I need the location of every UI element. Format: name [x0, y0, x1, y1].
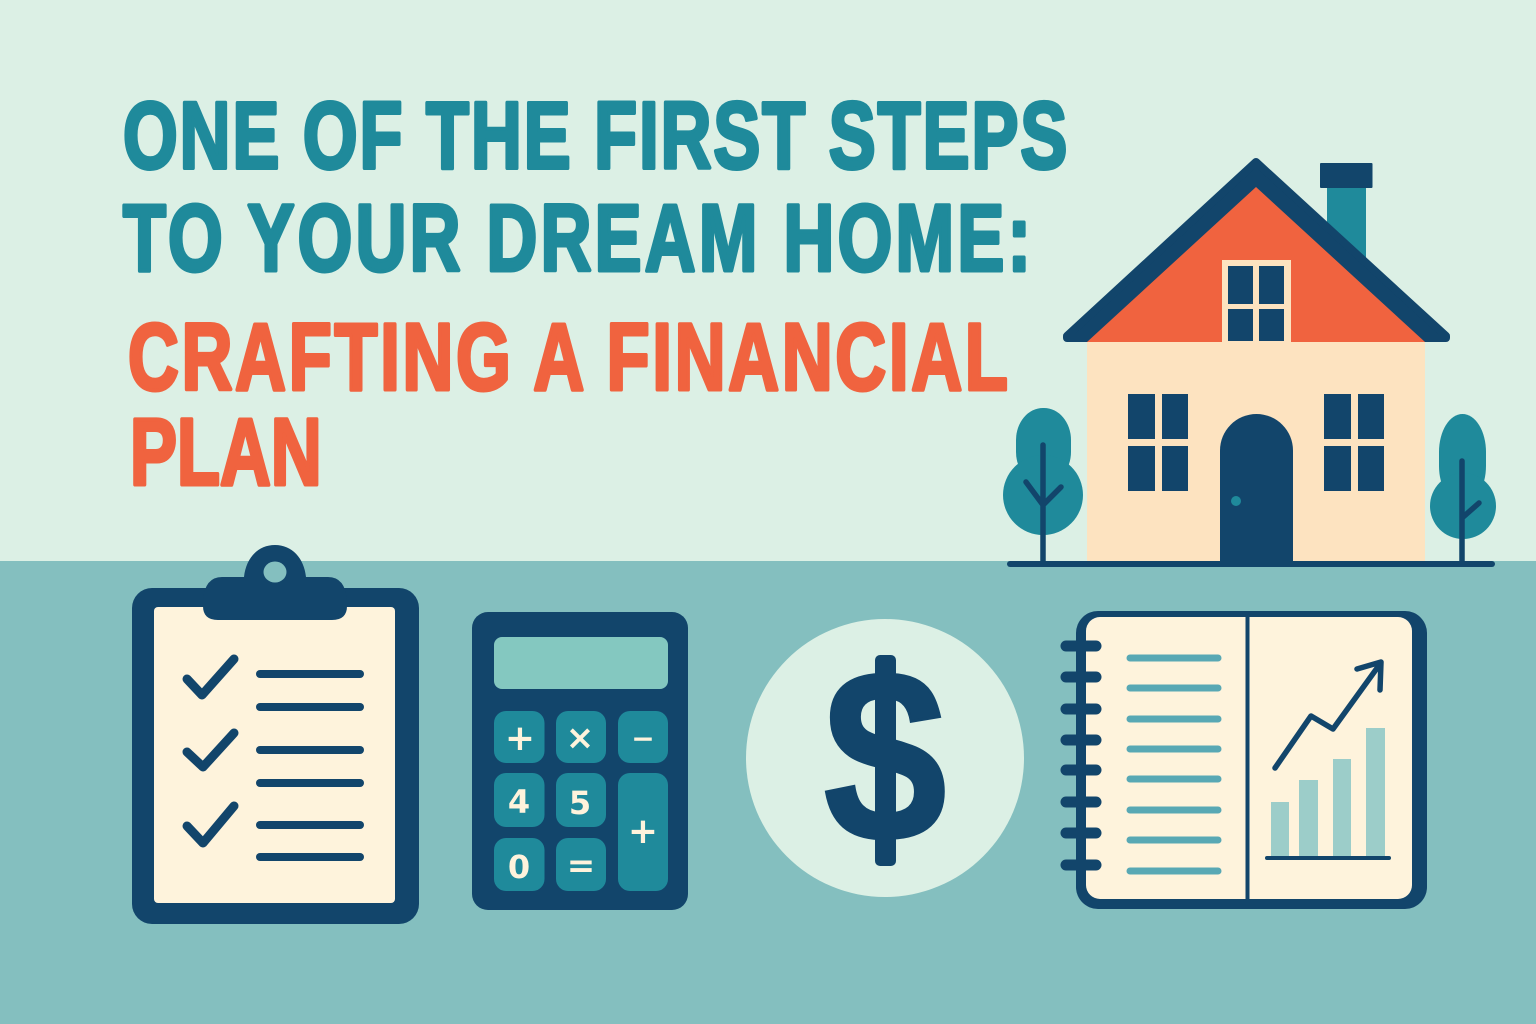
chimney — [1320, 163, 1372, 262]
key labels: × — [566, 718, 594, 758]
subheading line 1: CRAFTING A FINANCIAL — [128, 303, 1008, 410]
title — [123, 82, 1067, 505]
icon: calculator — [472, 612, 688, 910]
arrow: upward trend — [1275, 662, 1381, 768]
background: ground band — [0, 561, 1536, 1024]
key labels: 4 — [508, 783, 530, 821]
left tree — [1003, 408, 1083, 562]
subheading line 2: PLAN — [130, 398, 322, 505]
key labels: − — [631, 722, 655, 755]
heading line 2: TO YOUR DREAM HOME: — [123, 184, 1031, 291]
key labels: + — [505, 718, 535, 759]
clipboard board — [132, 588, 419, 924]
spiral rings — [1066, 646, 1096, 865]
left window — [1128, 394, 1188, 491]
icon: clipboard checklist — [132, 545, 419, 924]
key labels: + — [628, 811, 658, 852]
roof — [1067, 162, 1446, 342]
heading line 1: ONE OF THE FIRST STEPS — [123, 82, 1067, 188]
key labels: 0 — [508, 848, 530, 886]
background: sky — [0, 0, 1536, 561]
notebook text lines — [1130, 658, 1218, 871]
house wall — [1087, 342, 1425, 562]
icon: dollar coin — [746, 618, 1024, 897]
icon: notebook with growth chart — [1066, 611, 1427, 909]
bar chart — [1267, 728, 1389, 858]
check marks — [187, 659, 234, 843]
notebook cover — [1076, 611, 1427, 909]
right tree — [1430, 414, 1496, 562]
checklist lines — [260, 674, 360, 857]
paper — [154, 607, 395, 903]
calculator body — [472, 612, 688, 910]
key labels: 5 — [569, 784, 591, 822]
key labels — [505, 718, 658, 886]
icon: house with trees — [1003, 162, 1496, 566]
ground line — [1010, 561, 1492, 567]
key labels: = — [567, 846, 595, 886]
clip — [203, 545, 347, 620]
notebook pages — [1086, 617, 1412, 899]
calculator keys — [494, 711, 668, 891]
door — [1220, 414, 1293, 566]
dollar sign: $ — [823, 618, 947, 894]
coin circle — [746, 619, 1024, 897]
notebook spine — [1246, 617, 1250, 899]
right window — [1324, 394, 1384, 491]
attic window — [1222, 260, 1291, 342]
calculator display — [494, 637, 668, 689]
